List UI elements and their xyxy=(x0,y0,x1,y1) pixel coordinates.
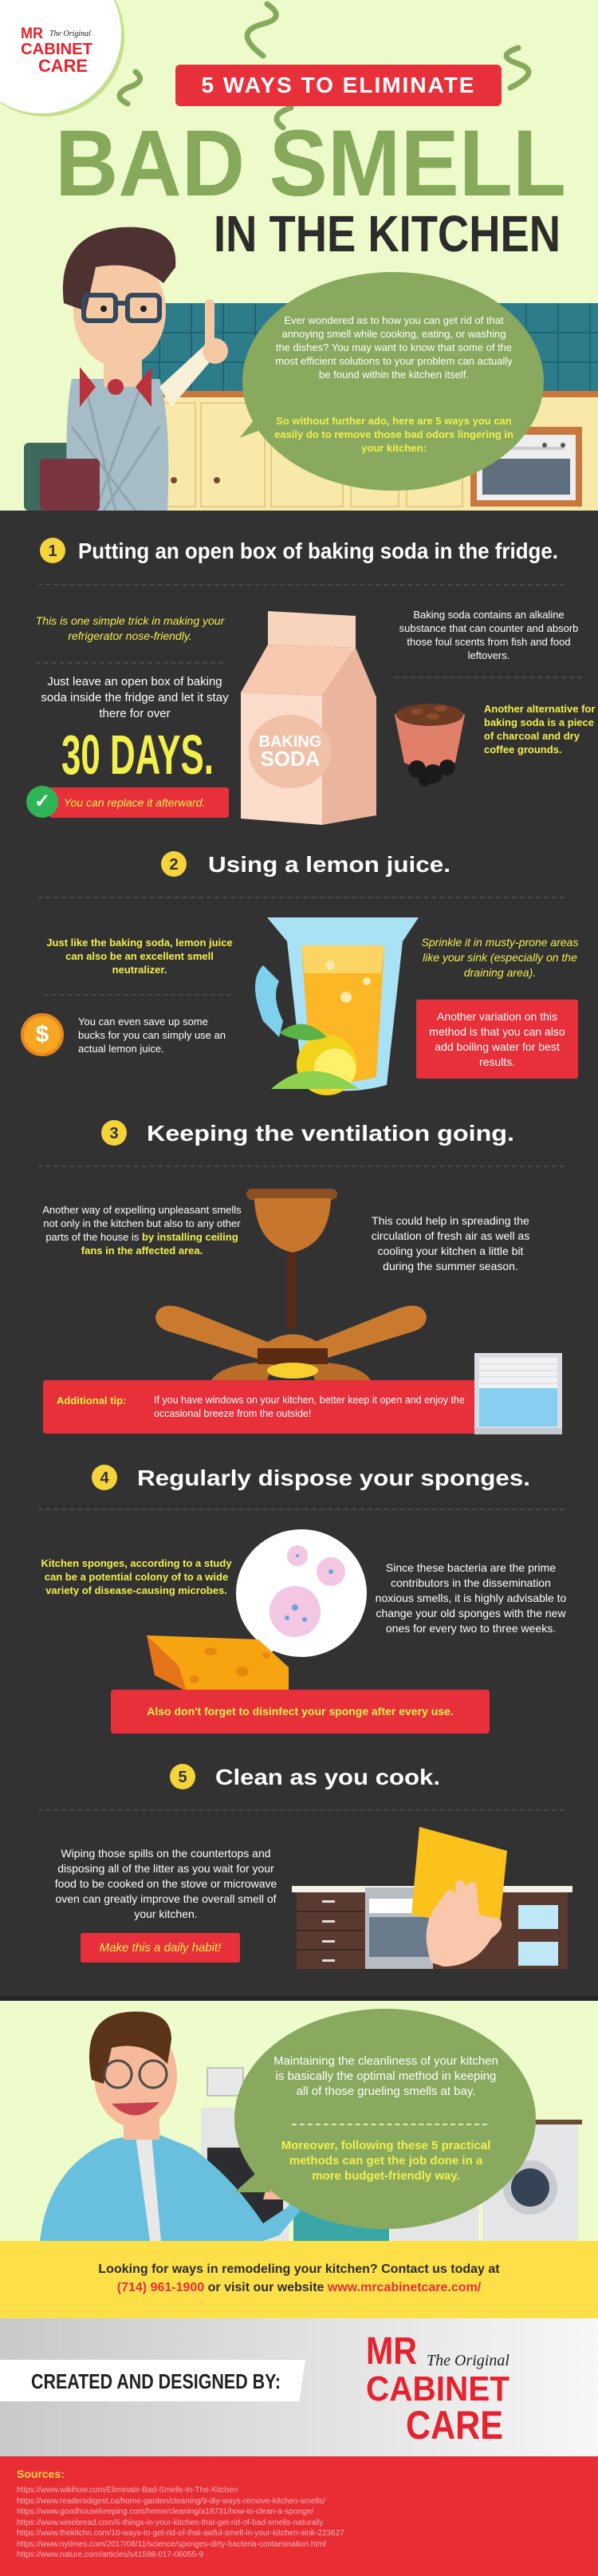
header panel xyxy=(0,0,598,511)
sources heading: Sources: xyxy=(17,2468,65,2480)
sources panel xyxy=(0,2456,598,2576)
panel: clean as you cook xyxy=(54,1827,572,1969)
conclusion text: Maintaining the cleanliness of your kitchen is basically the optimal method in keeping all of those grueling smells at bay. xyxy=(273,2054,498,2098)
heading 2: 2 xyxy=(169,856,179,874)
icon: coin: $ xyxy=(36,1021,49,1047)
conclusion highlight: Moreover, following these 5 practical methods can get the job done in a more budget-friendly way. xyxy=(281,2139,490,2183)
icon: kitchen counter with hand xyxy=(292,1827,572,1969)
sprinkle text: Sprinkle it in musty-prone areas like your sink (especially on the draining area). xyxy=(422,936,578,979)
heading 4: 4 xyxy=(100,1469,109,1487)
sources list: https://www.goodhousekeeping.com/home/cleaning/a18731/how-to-clean-a-sponge/ xyxy=(17,2507,313,2516)
wiping text: Wiping those spills on the countertops and disposing all of the litter as you wait for your food to be cooked on the stove or microwave oven can greatly improve the overall smell of your kitchen. xyxy=(55,1847,277,1920)
callout: disinfect: Also don't forget to disinfect your sponge after every use. xyxy=(147,1705,454,1718)
header illustration: kitchen xyxy=(142,303,598,511)
callout: daily habit: Make this a daily habit! xyxy=(100,1941,221,1955)
character: nerdy man xyxy=(24,227,228,511)
logo text: The Original xyxy=(49,30,91,38)
icon: baking soda box: SODA xyxy=(260,747,321,771)
neutralizer text: Just like the baking soda, lemon juice can also be an excellent smell neutralizer. xyxy=(46,937,233,976)
callout: replace: You can replace it afterward. xyxy=(64,796,205,809)
sources list: https://www.wikihow.com/Eliminate-Bad-Smells-In-The-Kitchen xyxy=(17,2486,238,2495)
speech bubble: intro xyxy=(242,272,544,491)
sources list: https://www.thekitchn.com/10-ways-to-get-rid-of-that-awful-smell-in-your-kitchen-sink-223627 xyxy=(17,2529,344,2538)
heading 5: 5 xyxy=(178,1769,187,1786)
callout: additional tip: If you have windows on your kitchen, better keep it open and enjoy the occasional breeze from the outside! xyxy=(154,1395,465,1419)
alternative text: Another alternative for baking soda is a piece of charcoal and dry coffee grounds. xyxy=(484,703,595,755)
logo text xyxy=(21,26,92,75)
created by label xyxy=(0,2360,305,2401)
callout: replace xyxy=(26,786,229,818)
bubble tail xyxy=(234,2160,270,2192)
logo badge xyxy=(0,0,121,113)
icon: check: ✓ xyxy=(34,791,50,812)
logo: mr cabinet care: MR xyxy=(366,2330,417,2373)
icon: window xyxy=(474,1353,562,1434)
microbes text: Kitchen sponges, according to a study can be a potential colony of to a wide variety of disease-causing microbes. xyxy=(41,1557,232,1596)
logo text: MR xyxy=(21,26,43,42)
contact band xyxy=(0,2241,598,2318)
panel: baking soda xyxy=(26,609,595,825)
heading 3: Keeping the ventilation going. xyxy=(147,1121,514,1146)
callout: boiling water xyxy=(416,1000,578,1079)
icon: lemon jug xyxy=(255,917,419,1095)
intro highlight: So without further ado, here are 5 ways you can easily do to remove those bad odors lingering in your kitchen: xyxy=(274,415,513,454)
appliances background xyxy=(201,2068,582,2241)
panel: sponges xyxy=(41,1529,566,1734)
heading 3: 3 xyxy=(109,1125,119,1142)
heading 1: 1 xyxy=(48,542,57,560)
panel: lemon juice xyxy=(21,917,579,1095)
closing panel xyxy=(0,1996,598,2241)
sources list: https://www.readersdigest.ca/home-garden/cleaning/9-diy-ways-remove-kitchen-smells/ xyxy=(17,2497,325,2505)
smoke wisps xyxy=(116,2,531,131)
sources list: https://www.wisebread.com/6-things-in-your-kitchen-that-get-rid-of-bad-smells-naturally xyxy=(17,2518,324,2527)
credits panel xyxy=(0,2318,598,2456)
icon: check xyxy=(26,786,58,818)
speech bubble: conclusion xyxy=(234,2009,536,2229)
just leave text: Just leave an open box of baking soda inside the fridge and let it stay there for over xyxy=(41,675,229,720)
fan text: Another way of expelling unpleasant smells not only in the kitchen but also to any other parts of the house is by installing ceiling fans in the affected area. xyxy=(42,1204,242,1256)
logo: mr cabinet care: The Original xyxy=(427,2352,509,2369)
icon: ceiling fan xyxy=(155,1189,427,1380)
icon: coin xyxy=(21,1013,64,1056)
subtitle: 5 ways xyxy=(175,65,502,106)
callout: additional tip xyxy=(43,1380,478,1434)
panel: ventilation xyxy=(42,1189,562,1434)
subtitle: 5 ways: 5 WAYS TO ELIMINATE xyxy=(201,73,475,97)
tip italic: This is one simple trick in making your refrigerator nose-friendly. xyxy=(36,614,224,642)
callout: disinfect xyxy=(111,1690,490,1734)
callout: boiling water: Another variation on this method is that you can also add boiling water for best results. xyxy=(429,1010,565,1068)
heading 2: Using a lemon juice. xyxy=(208,852,450,877)
character: happy man xyxy=(40,2012,301,2241)
logo: mr cabinet care xyxy=(366,2330,509,2442)
bubble tail xyxy=(231,401,277,438)
circulation text: This could help in spreading the circulation of fresh air as well as cooling your kitchen a little bit during the summer season. xyxy=(372,1214,529,1272)
contact band: (714) 961-1900 or visit our website www.mrcabinetcare.com/ xyxy=(117,2281,481,2294)
icon: bacteria bubble xyxy=(236,1529,367,1657)
save bucks text: You can even save up some bucks for you can simply use an actual lemon juice. xyxy=(78,1016,226,1055)
intro text: Ever wondered as to how you can get rid of that annoying smell while cooking, eating, or washing the dishes? You may want to know that some of the most efficient solutions to your problem can actually be found within the kitchen itself. xyxy=(275,314,513,381)
icon: baking soda box: BAKING xyxy=(259,733,321,751)
bacteria text: Since these bacteria are the prime contributors in the dissemination noxious smells, it is highly advisable to change your old sponges with the new ones for every two to three weeks. xyxy=(376,1561,566,1635)
callout: daily habit xyxy=(81,1933,240,1963)
icon: sponge xyxy=(147,1635,289,1690)
baking soda fact: Baking soda contains an alkaline substance that can counter and absorb those foul scents from fish and food leftovers. xyxy=(399,609,578,661)
heading 4: Regularly dispose your sponges. xyxy=(137,1466,530,1490)
icon: baking soda box xyxy=(241,611,376,825)
sources list xyxy=(17,2486,344,2559)
sources list: https://www.nytimes.com/2017/08/11/science/sponges-dirty-bacteria-contamination.html xyxy=(17,2540,326,2548)
logo text: CABINET xyxy=(21,41,92,58)
sources list: https://www.nature.com/articles/s41598-017-06055-9 xyxy=(17,2550,203,2559)
contact band: Looking for ways in remodeling your kitchen? Contact us today at xyxy=(98,2262,500,2276)
icon: charcoal pot xyxy=(395,704,465,787)
heading 5: Clean as you cook. xyxy=(215,1765,440,1789)
callout: additional tip: Additional tip: xyxy=(57,1395,126,1406)
